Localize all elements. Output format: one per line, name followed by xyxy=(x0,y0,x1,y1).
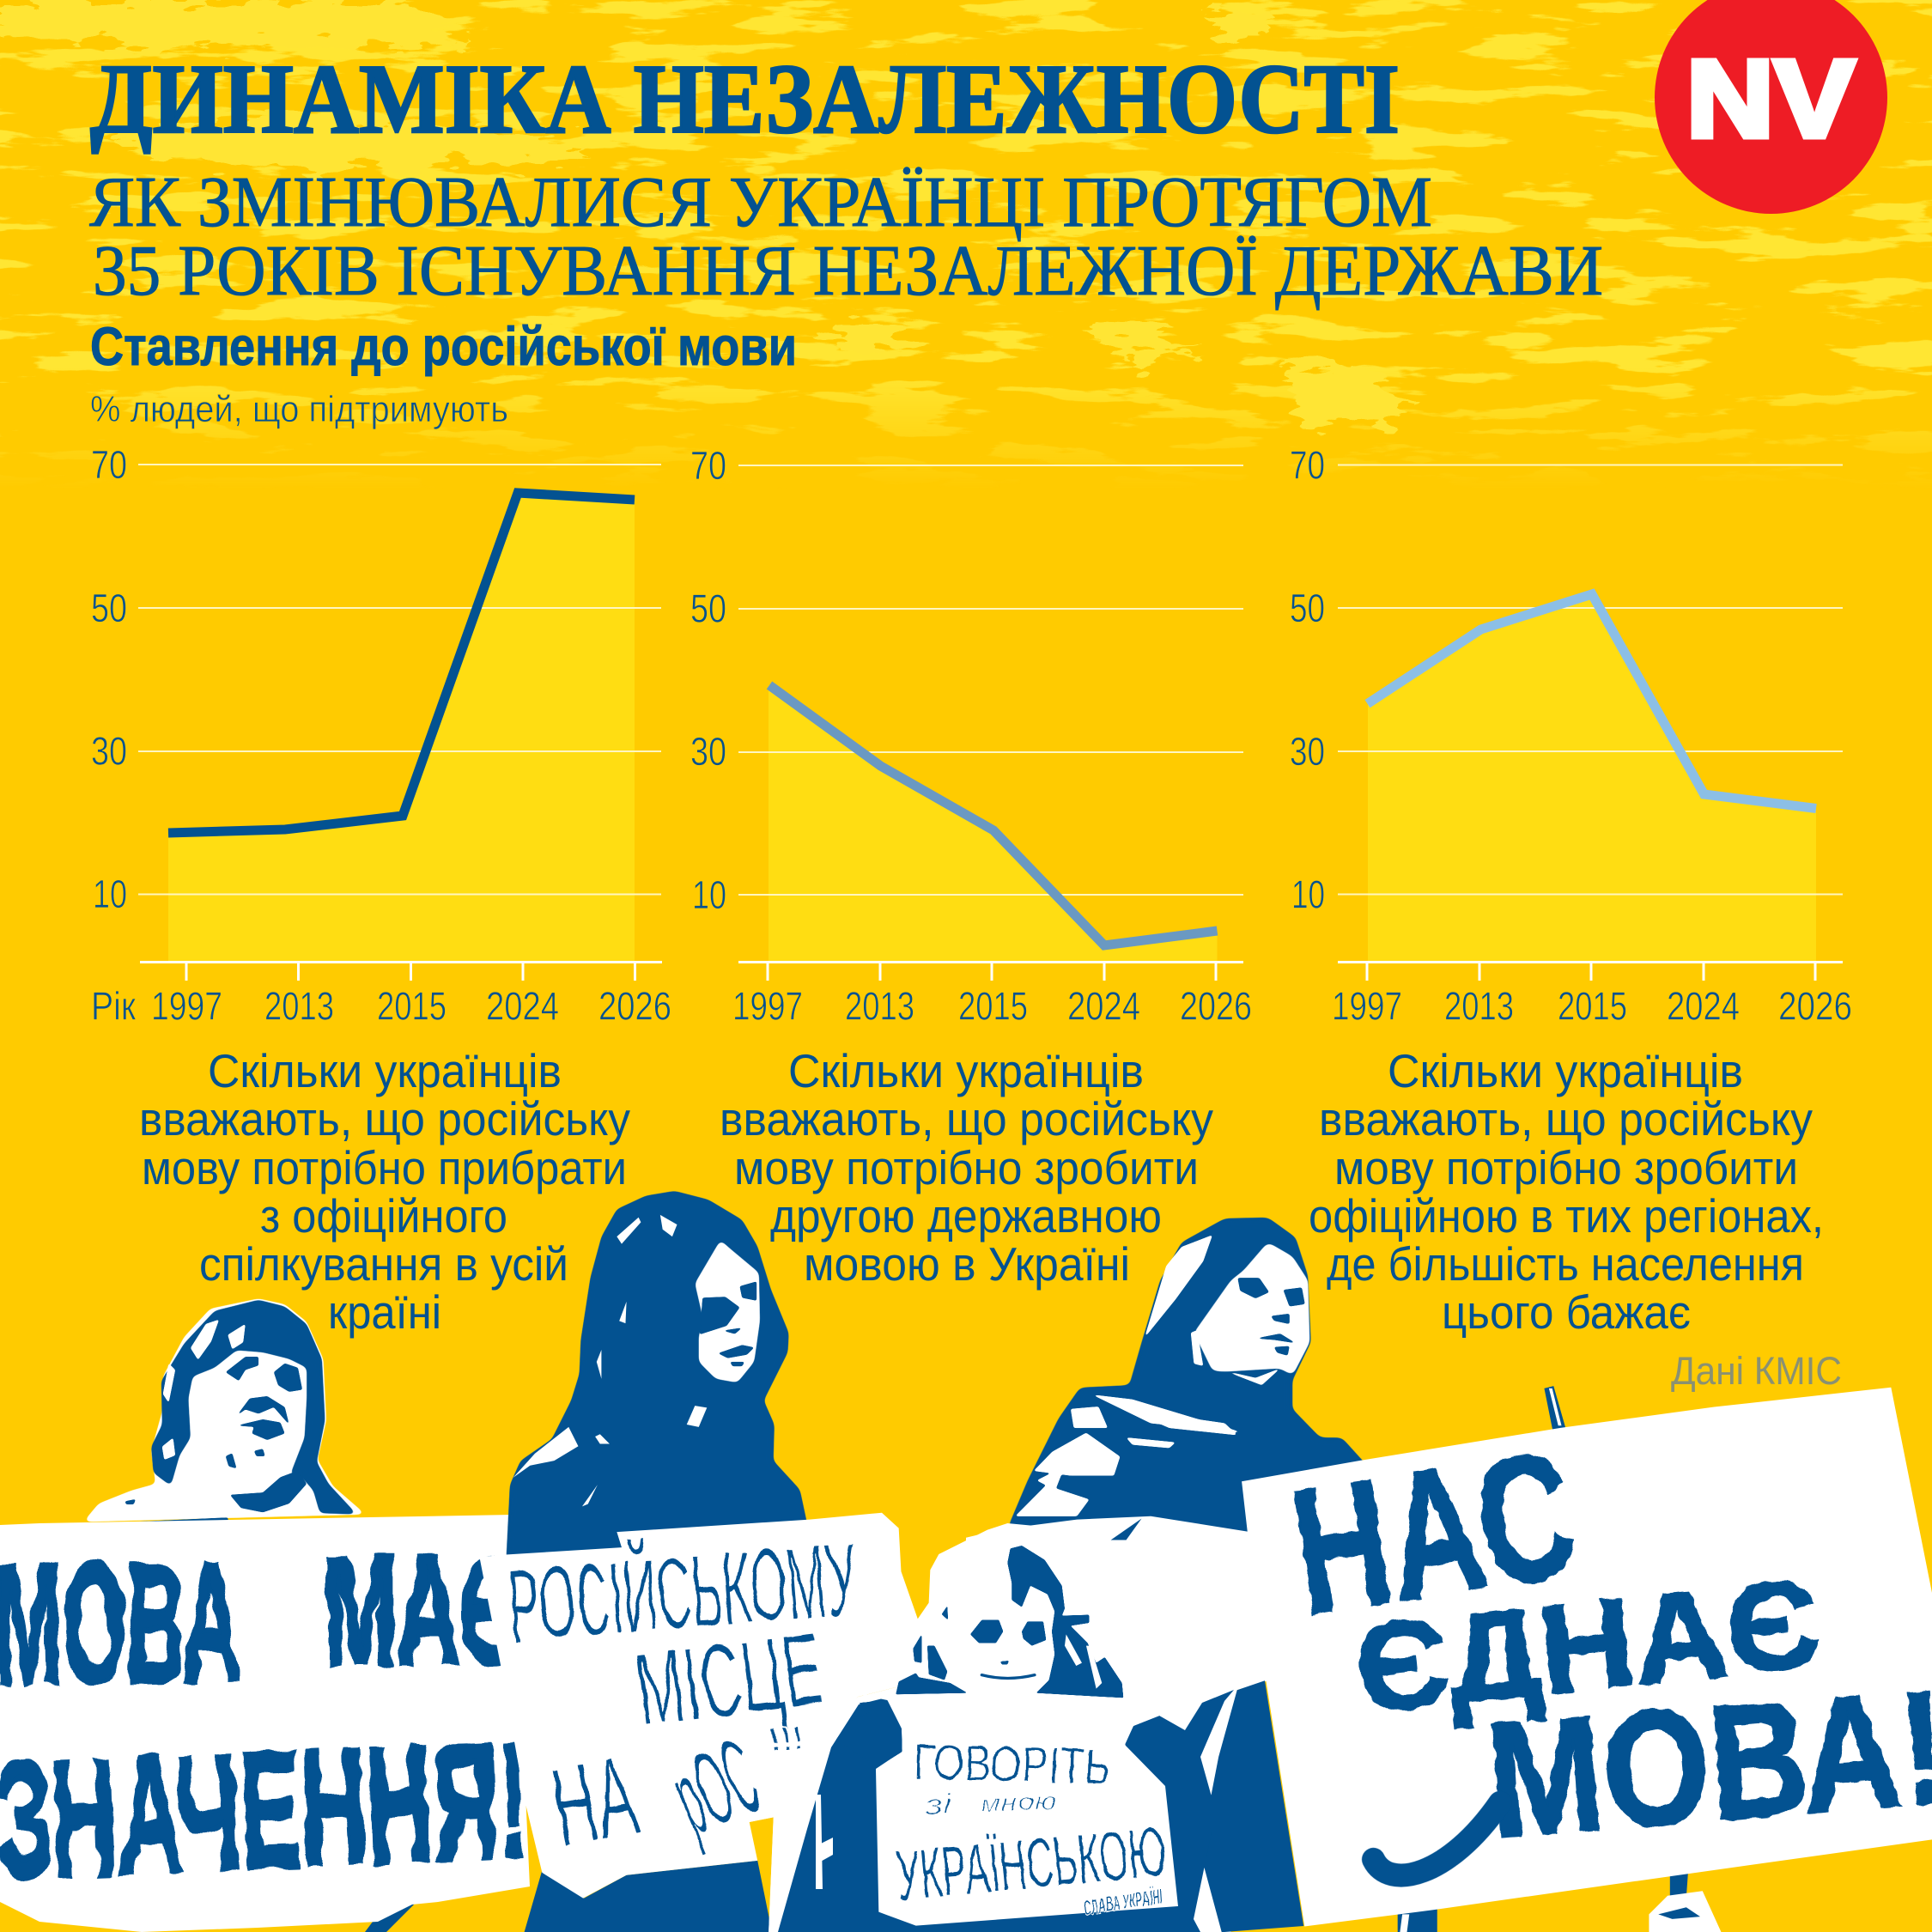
caption 3: Скільки українців xyxy=(1388,1044,1743,1097)
y axis labels 3 xyxy=(1290,443,1325,917)
placard: РОСІЙСЬКОМУ МІСЦЕ НА РОСІЇ: РОСІЙСЬКОМУ xyxy=(503,1521,861,1664)
subtitle xyxy=(89,162,1603,311)
y axis labels 2: 30 xyxy=(690,729,726,774)
subtitle: ЯК ЗМІНЮВАЛИСЯ УКРАЇНЦІ ПРОТЯГОМ xyxy=(89,162,1432,242)
placard 2 text: !!! xyxy=(767,1718,805,1760)
placard 2 text: МІСЦЕ xyxy=(629,1610,828,1748)
caption 3: де більшість населення xyxy=(1327,1237,1804,1291)
x axis labels 3 xyxy=(1332,984,1852,1029)
x axis labels 3: 2024 xyxy=(1667,984,1740,1029)
placard 3 text: мною xyxy=(980,1788,1058,1818)
body under placard 1 xyxy=(365,1898,421,1932)
x axis labels 1: 1997 xyxy=(151,984,222,1029)
illustration: child xyxy=(893,1523,1123,1698)
y axis labels 2: 10 xyxy=(692,872,726,917)
line 2 xyxy=(769,685,1218,945)
area 1 xyxy=(168,493,635,962)
placard 3 text: УКРАЇНСЬКОЮ xyxy=(893,1813,1170,1916)
placard 3 text xyxy=(893,1735,1170,1921)
y axis labels 3: 10 xyxy=(1291,872,1325,917)
x axis labels 3: 1997 xyxy=(1332,984,1402,1029)
x axis labels 1: 2024 xyxy=(486,984,559,1029)
caption 3: цього бажає xyxy=(1442,1285,1691,1339)
y axis labels 1: 70 xyxy=(91,442,127,487)
caption 3 xyxy=(1309,1044,1824,1339)
caption 1: вважають, що російську xyxy=(139,1092,630,1145)
illustration: placard pole and hand xyxy=(1398,1386,1721,1932)
placard 1 text: МАЄ xyxy=(324,1522,523,1698)
caption 2 xyxy=(720,1044,1213,1291)
line 1 xyxy=(168,493,635,833)
subtitle: 35 РОКІВ ІСНУВАННЯ НЕЗАЛЕЖНОЇ ДЕРЖАВИ xyxy=(93,231,1603,311)
placard: РОСІЙСЬКОМУ МІСЦЕ НА РОСІЇ xyxy=(479,1513,1050,1932)
illustration: white sleeve and torso of front figure xyxy=(966,1516,1303,1932)
x axis labels 2: 2013 xyxy=(845,984,914,1029)
y axis labels 1: 50 xyxy=(91,586,127,630)
x axis labels 2: 2015 xyxy=(958,984,1028,1029)
chart 2: second state language xyxy=(690,443,1252,1029)
background texture xyxy=(0,0,1932,489)
x axis labels 1: Рік xyxy=(91,984,137,1029)
x axis labels 3: 2026 xyxy=(1778,984,1852,1029)
y axis labels 2: 70 xyxy=(690,443,726,488)
x axis labels 2: 1997 xyxy=(732,984,803,1029)
logo: NV xyxy=(1655,0,1887,214)
area 2 xyxy=(769,685,1218,962)
chart 1: remove Russian from official communication xyxy=(91,442,671,1029)
caption 1: мову потрібно прибрати xyxy=(142,1141,627,1194)
caption 1: спілкування в усій xyxy=(199,1237,568,1291)
placard: ГОВОРІТЬ ЗІ МНОЮ УКРАЇНСЬКОЮ xyxy=(835,1694,1178,1926)
caption 2: Скільки українців xyxy=(788,1044,1144,1097)
section heading: Ставлення до російської мови xyxy=(90,317,797,377)
x axis labels 2 xyxy=(732,984,1252,1029)
logo: NV: NV xyxy=(1686,38,1855,161)
caption 1: країні xyxy=(328,1285,441,1339)
caption 3: офіційною в тих регіонах, xyxy=(1309,1189,1824,1242)
x axis labels 3: 2015 xyxy=(1558,984,1627,1029)
axis unit note: % людей, що підтримують xyxy=(90,389,508,430)
placard 4 text xyxy=(1280,1413,1932,1873)
x axis labels 3: 2013 xyxy=(1444,984,1514,1029)
placard 2 text xyxy=(503,1521,861,1871)
y axis labels 3: 30 xyxy=(1290,729,1325,774)
placard: НАС ЄДНАЄ МОВА! xyxy=(1242,1388,1932,1927)
caption 1: з офіційного xyxy=(260,1189,507,1242)
caption 1: Скільки українців xyxy=(208,1044,562,1097)
placard 3 text: СЛАВА УКРАЇНІ xyxy=(1082,1885,1164,1921)
placard 4 text: ЄДНАЄ xyxy=(1349,1552,1826,1741)
area 3 xyxy=(1368,594,1816,962)
placard 2 text: рОС xyxy=(656,1715,775,1857)
caption 2: вважають, що російську xyxy=(720,1092,1213,1145)
placard 1 text xyxy=(0,1522,532,1912)
placard 1 text: ЗНАЧЕННЯ! xyxy=(0,1707,532,1912)
caption 1 xyxy=(139,1044,630,1339)
placard 2 text: НА xyxy=(542,1731,647,1871)
x axis labels 1: 2026 xyxy=(598,984,671,1029)
title: ДИНАМІКА НЕЗАЛЕЖНОСТІ xyxy=(90,45,1400,155)
x axis labels 1: 2013 xyxy=(264,984,334,1029)
illustration: woman with long hair xyxy=(506,1191,810,1932)
brush tail xyxy=(1373,1802,1500,1875)
placard 4 text: НАС xyxy=(1280,1413,1588,1654)
placard 3 text: зі xyxy=(923,1788,953,1820)
caption 3: мову потрібно зробити xyxy=(1334,1141,1798,1194)
caption 2: мову потрібно зробити xyxy=(734,1141,1199,1194)
source note: Дані КМІС xyxy=(1671,1349,1842,1393)
y axis labels 3: 70 xyxy=(1290,443,1325,488)
illustration: woman with short hair xyxy=(83,1298,366,1534)
x axis labels 1: 2015 xyxy=(377,984,447,1029)
x axis labels 2: 2026 xyxy=(1180,984,1252,1029)
illustration: arms holding child's placard xyxy=(778,1690,1234,1932)
lower body of long-haired woman xyxy=(525,1861,772,1932)
caption 3: вважають, що російську xyxy=(1319,1092,1813,1145)
y axis labels 1 xyxy=(91,442,127,916)
y axis labels 2: 50 xyxy=(690,586,726,630)
chart 3: official in regions xyxy=(1290,443,1852,1029)
y axis labels 1: 30 xyxy=(91,728,127,773)
x axis labels 2: 2024 xyxy=(1067,984,1140,1029)
placard 1 text: МОВА xyxy=(0,1526,243,1722)
y axis labels 1: 10 xyxy=(93,872,127,916)
placard 3 text: ГОВОРІТЬ xyxy=(913,1735,1112,1795)
caption 2: мовою в Україні xyxy=(804,1237,1130,1291)
line 3 xyxy=(1367,594,1816,809)
illustration: woman in striped scarf xyxy=(1009,1218,1397,1614)
x axis labels 1 xyxy=(91,984,671,1029)
caption 2: другою державною xyxy=(770,1189,1162,1242)
y axis labels 2 xyxy=(690,443,726,917)
placard: МОВА МАЄ ЗНАЧЕННЯ xyxy=(0,1515,532,1932)
y axis labels 3: 50 xyxy=(1290,586,1325,630)
